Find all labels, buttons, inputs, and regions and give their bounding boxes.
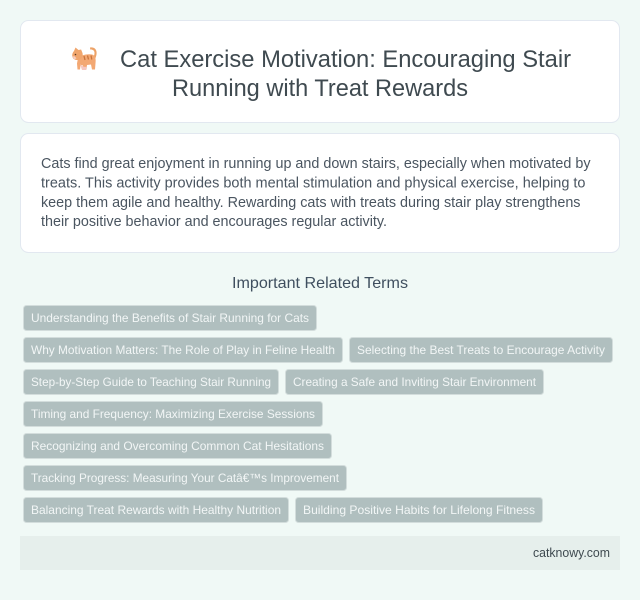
tag: Balancing Treat Rewards with Healthy Nutrition — [31, 503, 281, 517]
tag — [24, 434, 332, 458]
tag — [24, 370, 278, 394]
text block: description: treats. This activity provides both mental stimulation and physical exercise, helping to — [41, 176, 586, 192]
panel: title card — [20, 20, 620, 122]
footer: catknowy.com — [533, 546, 610, 560]
footer — [20, 536, 620, 570]
panel: term tags — [24, 306, 612, 522]
tag — [24, 466, 346, 490]
tag: Timing and Frequency: Maximizing Exercise Sessions — [31, 407, 315, 421]
tag — [24, 498, 288, 522]
tag — [24, 402, 322, 426]
tag — [286, 370, 544, 394]
tag: Creating a Safe and Inviting Stair Environment — [293, 375, 537, 389]
icon: cat — [72, 47, 97, 70]
tag — [350, 338, 612, 362]
tag: Step-by-Step Guide to Teaching Stair Running — [31, 375, 271, 389]
text block: description: keep them agile and healthy. Rewarding cats with treats during stair play strengthens — [41, 195, 580, 211]
tag — [24, 306, 316, 330]
tag: Building Positive Habits for Lifelong Fitness — [303, 503, 535, 517]
tag: Recognizing and Overcoming Common Cat Hesitations — [31, 439, 324, 453]
title: Cat Exercise Motivation: Encouraging Stair — [120, 46, 571, 73]
tag: Understanding the Benefits of Stair Running for Cats — [31, 311, 309, 325]
title — [120, 46, 571, 102]
title: Running with Treat Rewards — [172, 75, 468, 102]
tag: Tracking Progress: Measuring Your Catâ€™s Improvement — [31, 471, 340, 485]
tag: Why Motivation Matters: The Role of Play in Feline Health — [31, 343, 335, 357]
heading: related terms: Important Related Terms — [232, 275, 408, 292]
panel: description card — [20, 134, 620, 252]
tag: Selecting the Best Treats to Encourage Activity — [357, 343, 605, 357]
text block: description: their positive behavior and encourages regular activity. — [41, 214, 387, 230]
tag — [24, 338, 342, 362]
text block: description: Cats find great enjoyment in running up and down stairs, especially when motivated by — [41, 156, 591, 172]
text block: description — [41, 156, 591, 230]
tag — [296, 498, 542, 522]
